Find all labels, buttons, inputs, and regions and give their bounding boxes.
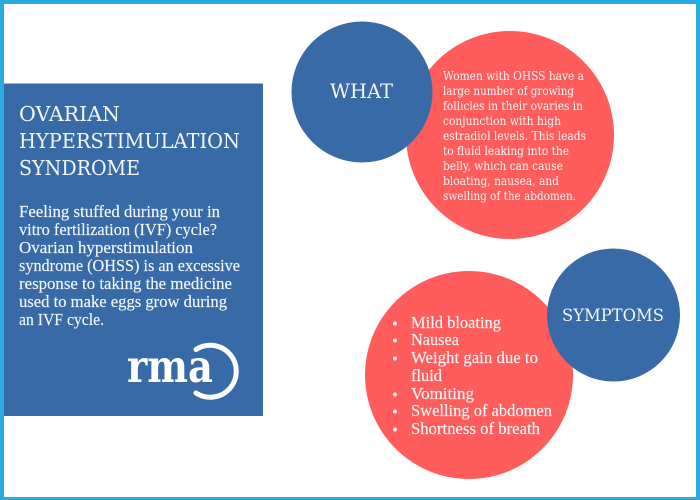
panel: symptoms list: fluid	[411, 366, 443, 385]
panel: symptoms list: Vomiting	[411, 384, 474, 403]
panel: what description: to fluid leaking into the	[443, 144, 569, 158]
panel: introduction	[4, 84, 263, 416]
intro text	[19, 202, 240, 329]
heading circle: what	[292, 22, 432, 162]
panel: what description: Women with OHSS have a	[443, 69, 584, 83]
panel: what description: conjunction with high	[443, 114, 561, 128]
panel: what description: follicles in their ovaries in	[443, 99, 583, 113]
heading circle: symptoms	[547, 248, 680, 382]
intro text: vitro fertilization (IVF) cycle?	[19, 220, 217, 239]
title	[19, 102, 240, 180]
intro text: used to make eggs grow during	[19, 292, 227, 311]
heading circle: what: WHAT	[330, 80, 393, 103]
intro text: syndrome (OHSS) is an excessive	[19, 256, 240, 275]
panel: what description: estradiol levels. This leads	[443, 129, 586, 143]
panel: symptoms list: Weight gain due to	[411, 348, 538, 367]
panel: what description	[406, 31, 614, 239]
panel: symptoms list: Swelling of abdomen	[411, 401, 552, 420]
intro text: an IVF cycle.	[19, 310, 104, 329]
title: OVARIAN	[19, 102, 120, 126]
intro text: Feeling stuffed during your in	[19, 202, 220, 221]
title: SYNDROME	[19, 156, 140, 180]
panel: symptoms list	[365, 271, 573, 479]
logo: rma: rma	[127, 340, 213, 393]
panel: symptoms list: Nausea	[411, 330, 460, 349]
intro text: response to taking the medicine	[19, 274, 232, 293]
heading circle: symptoms: SYMPTOMS	[562, 306, 664, 325]
panel: symptoms list: Shortness of breath	[411, 419, 541, 438]
panel: what description: bloating, nausea, and	[443, 174, 559, 188]
panel: what description: large number of growing	[443, 84, 574, 98]
intro text: Ovarian hyperstimulation	[19, 238, 193, 257]
panel: what description: belly, which can cause	[443, 159, 563, 173]
title: HYPERSTIMULATION	[19, 129, 240, 153]
panel: what description: swelling of the abdomen.	[443, 189, 576, 203]
panel: symptoms list: Mild bloating	[411, 313, 501, 332]
